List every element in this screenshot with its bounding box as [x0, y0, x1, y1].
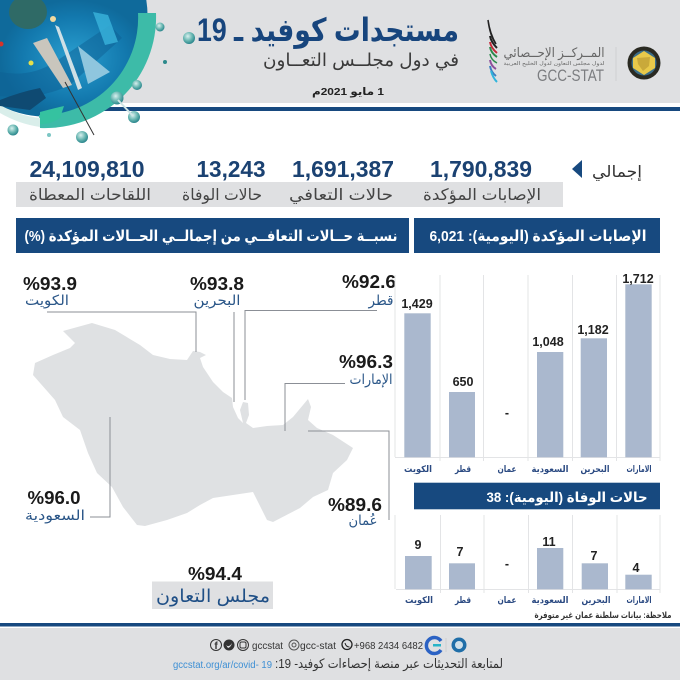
icon: facebook — [210, 640, 222, 652]
icon: arrow — [572, 160, 582, 178]
heading: recovery rate: نسبــة حــالات التعافــي من إجمالــي الحــالات المؤكدة (%) — [24, 228, 398, 245]
map: GCC recovery rates: قطر — [368, 292, 394, 309]
logo: GCC-STAT: المــركــز الإحــصائي — [504, 45, 604, 61]
bar chart: daily deaths: - — [505, 557, 509, 571]
values: 1,429 — [401, 297, 433, 311]
bar chart: daily deaths: قطر — [454, 595, 471, 606]
heading: daily deaths: حالات الوفاة (اليومية): 38 — [486, 489, 648, 506]
bar chart: daily deaths: البحرين — [582, 595, 610, 606]
bar chart: daily confirmed cases: 650 — [453, 375, 473, 389]
handle: gccstat — [252, 641, 283, 652]
bar chart: daily confirmed cases: السعودية — [532, 464, 568, 475]
total label: إجمالي — [592, 164, 642, 182]
subtitle: في دول مجلــس التعــاون — [263, 50, 459, 71]
bar chart: daily confirmed cases — [395, 272, 660, 475]
bar chart: daily confirmed cases: 1,182 — [577, 323, 609, 337]
icon: facebook: f — [214, 641, 218, 652]
heading: daily confirmed: الإصابات المؤكدة (اليومية): 6,021 — [429, 228, 646, 245]
stat: confirmed: 1,790,839 — [430, 156, 532, 182]
label: deaths: حالات الوفاة — [182, 187, 262, 205]
stats strip — [16, 182, 563, 207]
leader lines — [47, 310, 389, 520]
bars — [405, 556, 432, 589]
stat: recovered: 1,691,387 — [292, 156, 394, 182]
footer link text: gccstat.org/ar/covid- 19 — [173, 660, 272, 671]
map: GCC recovery rates: عُمان — [348, 512, 378, 528]
GCC total: %94.4 — [188, 564, 242, 584]
bar chart: daily deaths: 4 — [633, 561, 640, 575]
country labels: الكويت — [404, 464, 432, 475]
UAE: %96.3 — [339, 352, 393, 372]
bar chart: daily deaths: عمان — [498, 595, 516, 605]
Qatar: %92.6 — [342, 272, 396, 292]
icon: census logo — [426, 637, 441, 654]
bar chart: daily deaths: 11 — [542, 535, 556, 549]
Oman: %89.6 — [328, 495, 382, 515]
map: GCC recovery rates: الإمارات — [350, 371, 392, 388]
footer contacts — [210, 637, 466, 654]
logo: GCC emblem — [628, 46, 660, 80]
bar chart: daily confirmed cases: - — [505, 406, 509, 420]
bar chart: daily deaths: الامارات — [626, 595, 652, 606]
footer link text: لمتابعة التحديثات عبر منصة إحصاءات كوفيد- 19: — [275, 656, 503, 672]
bar chart: daily confirmed cases: البحرين — [580, 464, 610, 475]
Saudi: %96.0 — [28, 488, 80, 508]
Kuwait: %93.9 — [23, 274, 77, 294]
illustration: medical circle with needle and molecules — [0, 0, 195, 143]
bar chart: daily confirmed cases: الامارات — [626, 464, 652, 475]
icon: at — [289, 640, 299, 650]
footer band — [0, 623, 680, 680]
map: GCC recovery rates: الكويت — [25, 292, 69, 309]
label: vaccines: اللقاحات المعطاة — [29, 187, 151, 204]
phone: +968 2434 6482 — [354, 641, 423, 652]
heading: recovery rate — [16, 218, 409, 253]
heading: daily deaths — [414, 483, 660, 509]
bar chart: daily deaths — [395, 515, 660, 606]
label: recovered: حالات التعافي — [289, 187, 393, 205]
bar chart: daily confirmed cases: قطر — [454, 464, 471, 475]
logo: GCC-STAT: GCC-STAT — [537, 66, 604, 85]
logo: GCC-STAT: لدول مجلس التعاون لدول الخليج العربية — [504, 61, 605, 67]
date: 1 مايو 2021م — [312, 86, 384, 98]
section: totals — [16, 156, 642, 207]
bar chart: daily confirmed cases: 1,712 — [622, 272, 654, 286]
icon: whatsapp — [342, 640, 352, 650]
label: confirmed: الإصابات المؤكدة — [423, 187, 541, 205]
bar chart: daily deaths: 7 — [591, 549, 598, 563]
stat: deaths: 13,243 — [196, 156, 266, 182]
heading: daily confirmed — [414, 218, 660, 253]
Bahrain: %93.8 — [190, 274, 244, 294]
map: GCC recovery rates — [23, 272, 396, 609]
logo: GCC-STAT — [488, 20, 616, 85]
icon: instagram — [238, 640, 248, 650]
footer link text — [173, 656, 503, 672]
bar chart: daily confirmed cases: عمان — [498, 464, 516, 474]
values: 9 — [415, 538, 422, 552]
bar chart: daily deaths: السعودية — [532, 595, 568, 606]
icon: round logo — [452, 638, 466, 652]
title: مستجدات كوفيد ـ 19 — [197, 12, 459, 49]
country labels: الكويت — [405, 595, 433, 606]
bar chart: daily confirmed cases: 1,048 — [532, 335, 564, 349]
bars — [404, 313, 431, 457]
map: GCC recovery rates: السعودية — [25, 507, 85, 524]
handle: gcc-stat — [300, 641, 336, 652]
map: GCC recovery rates: البحرين — [194, 292, 240, 309]
stat: vaccines: 24,109,810 — [30, 156, 144, 182]
map: GCC recovery rates: مجلس التعاون — [156, 586, 270, 607]
map shape — [33, 323, 353, 526]
bar chart: daily deaths: 7 — [457, 545, 464, 559]
icon: twitter — [224, 640, 234, 650]
header band — [0, 0, 680, 111]
